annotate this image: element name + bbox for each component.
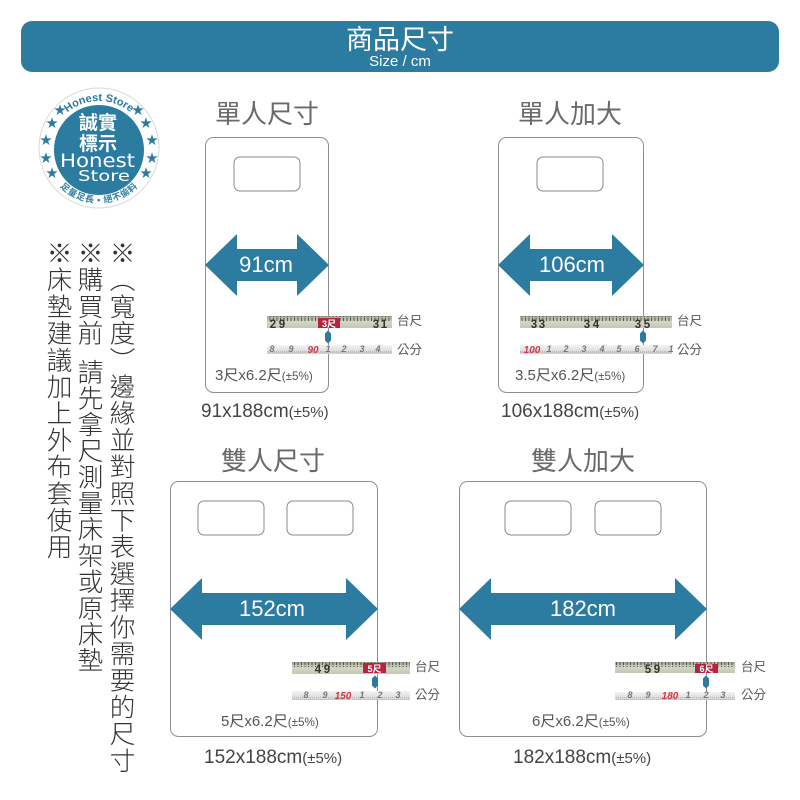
ruler bbox=[267, 313, 423, 357]
badge: honest store: ★ bbox=[146, 133, 158, 147]
ruler bbox=[292, 659, 441, 702]
header banner bbox=[21, 21, 779, 72]
width label: 91cm bbox=[239, 252, 293, 277]
bed outline bbox=[206, 138, 328, 392]
left pillow bbox=[505, 501, 571, 535]
ruler: 9 bbox=[279, 319, 285, 331]
title: 商品尺寸 bbox=[346, 25, 454, 55]
notes: vertical text bbox=[41, 240, 141, 774]
panel: single size bbox=[201, 99, 423, 422]
ruler: 9 bbox=[324, 664, 330, 676]
badge: honest store: ★ bbox=[40, 151, 52, 165]
ruler: 台尺 bbox=[741, 659, 767, 674]
ruler: 4 bbox=[593, 319, 600, 331]
ruler: 9 bbox=[654, 664, 660, 676]
ruler: 3 bbox=[395, 690, 401, 700]
ruler: 3 bbox=[359, 344, 365, 354]
panel: queen size bbox=[459, 446, 767, 768]
badge: honest store: ★ bbox=[132, 103, 144, 117]
badge: honest store: 標示 bbox=[79, 133, 117, 155]
badge: honest store: Honest bbox=[60, 150, 135, 172]
panel: double size bbox=[170, 446, 441, 768]
width arrow bbox=[205, 234, 329, 296]
notes: vertical text: ※（寬度）邊緣並對照下表選擇你需要的尺寸 bbox=[104, 240, 141, 774]
ruler: 5尺 bbox=[367, 664, 382, 674]
ruler: 1 bbox=[325, 344, 331, 354]
ruler: 4 bbox=[315, 664, 322, 676]
ruler: 公分 bbox=[677, 343, 703, 357]
ruler: 1 bbox=[381, 319, 388, 331]
ruler: 4 bbox=[598, 344, 605, 354]
badge: honest store bbox=[38, 88, 160, 208]
left pillow bbox=[198, 501, 264, 535]
ruler bbox=[520, 313, 703, 357]
ruler: 3尺 bbox=[322, 319, 336, 329]
ruler: 7 bbox=[652, 344, 658, 354]
ruler: 2 bbox=[702, 690, 709, 700]
ruler: 2 bbox=[562, 344, 569, 354]
ruler: 3 bbox=[720, 690, 726, 700]
ruler: 台尺 bbox=[397, 313, 423, 328]
ruler: 90 bbox=[307, 345, 319, 356]
ruler: 180 bbox=[662, 691, 679, 702]
badge: honest store: ★ bbox=[46, 116, 58, 130]
ruler: 5 bbox=[645, 664, 652, 676]
badge: honest store: 誠實 bbox=[79, 112, 117, 134]
ruler: 3 bbox=[539, 319, 545, 331]
ruler: 150 bbox=[335, 691, 352, 702]
size in cm: 152x188cm(±5%) bbox=[204, 747, 342, 768]
ruler: 5 bbox=[616, 344, 622, 354]
badge: honest store: ★ bbox=[140, 166, 152, 180]
bed outline bbox=[460, 482, 706, 736]
ruler: 1 bbox=[668, 344, 674, 354]
size in cm: 106x188cm(±5%) bbox=[501, 401, 639, 422]
heading: 單人加大 bbox=[518, 99, 622, 129]
ruler: 4 bbox=[374, 344, 381, 354]
badge: honest store: Store bbox=[78, 167, 130, 185]
ruler: 台尺 bbox=[415, 659, 441, 674]
badge: honest store: 足量足長 • 絕不偷料 bbox=[60, 182, 138, 204]
ruler: 3 bbox=[581, 344, 587, 354]
size in chi: 6尺x6.2尺(±5%) bbox=[532, 713, 630, 730]
ruler: 2 bbox=[270, 319, 276, 331]
ruler: 9 bbox=[288, 344, 294, 354]
ruler: 3 bbox=[373, 319, 379, 331]
size in chi: 3尺x6.2尺(±5%) bbox=[215, 367, 313, 384]
width arrow bbox=[459, 578, 707, 640]
width arrow bbox=[170, 578, 378, 640]
ruler: 6 bbox=[634, 344, 640, 354]
notes: vertical text: ※床墊建議加上外布套使用 bbox=[41, 240, 78, 560]
badge: honest store: ★ bbox=[40, 133, 52, 147]
notes: vertical text: 請先拿尺測量床架或原床墊 bbox=[72, 359, 109, 673]
ruler: 公分 bbox=[397, 343, 423, 357]
badge: honest store: ★ bbox=[140, 116, 152, 130]
width label: 152cm bbox=[239, 596, 305, 621]
ruler: 100 bbox=[524, 345, 541, 356]
ruler: 6尺 bbox=[699, 664, 714, 674]
bed outline bbox=[170, 482, 378, 736]
size in chi: 5尺x6.2尺(±5%) bbox=[221, 713, 319, 730]
heading: 單人尺寸 bbox=[215, 99, 319, 129]
ruler: 9 bbox=[322, 690, 328, 700]
bed outline bbox=[498, 138, 644, 392]
width label: 182cm bbox=[550, 596, 616, 621]
notes: vertical text: ※購買前 bbox=[72, 240, 109, 347]
ruler: 8 bbox=[303, 690, 309, 700]
size in cm: 91x188cm(±5%) bbox=[201, 401, 329, 422]
badge: honest store: ★ bbox=[146, 151, 158, 165]
width arrow bbox=[498, 234, 644, 296]
right pillow bbox=[287, 501, 353, 535]
ruler: 5 bbox=[644, 319, 651, 331]
ruler: 1 bbox=[685, 690, 691, 700]
ruler: 公分 bbox=[415, 688, 441, 702]
ruler: 3 bbox=[635, 319, 641, 331]
ruler: 1 bbox=[546, 344, 552, 354]
ruler: 1 bbox=[359, 690, 365, 700]
heading: 雙人加大 bbox=[531, 446, 635, 476]
pillow bbox=[234, 157, 300, 191]
heading: 雙人尺寸 bbox=[221, 446, 325, 476]
ruler: 9 bbox=[645, 690, 651, 700]
badge: honest store: Honest Store bbox=[64, 94, 133, 112]
ruler: 8 bbox=[269, 344, 275, 354]
badge: honest store: ★ bbox=[54, 103, 66, 117]
size in chi: 3.5尺x6.2尺(±5%) bbox=[515, 367, 625, 384]
ruler: 8 bbox=[627, 690, 633, 700]
ruler: 台尺 bbox=[677, 313, 703, 328]
subtitle: Size / cm bbox=[369, 53, 431, 70]
right pillow bbox=[595, 501, 661, 535]
ruler: 3 bbox=[531, 319, 537, 331]
ruler: 2 bbox=[376, 690, 383, 700]
ruler: 公分 bbox=[741, 688, 767, 702]
pillow bbox=[537, 157, 603, 191]
panel: single plus size bbox=[498, 99, 703, 422]
ruler: 2 bbox=[340, 344, 347, 354]
ruler: 3 bbox=[584, 319, 590, 331]
ruler bbox=[615, 659, 767, 702]
width label: 106cm bbox=[539, 252, 605, 277]
badge: honest store: ★ bbox=[46, 166, 58, 180]
size in cm: 182x188cm(±5%) bbox=[513, 747, 651, 768]
